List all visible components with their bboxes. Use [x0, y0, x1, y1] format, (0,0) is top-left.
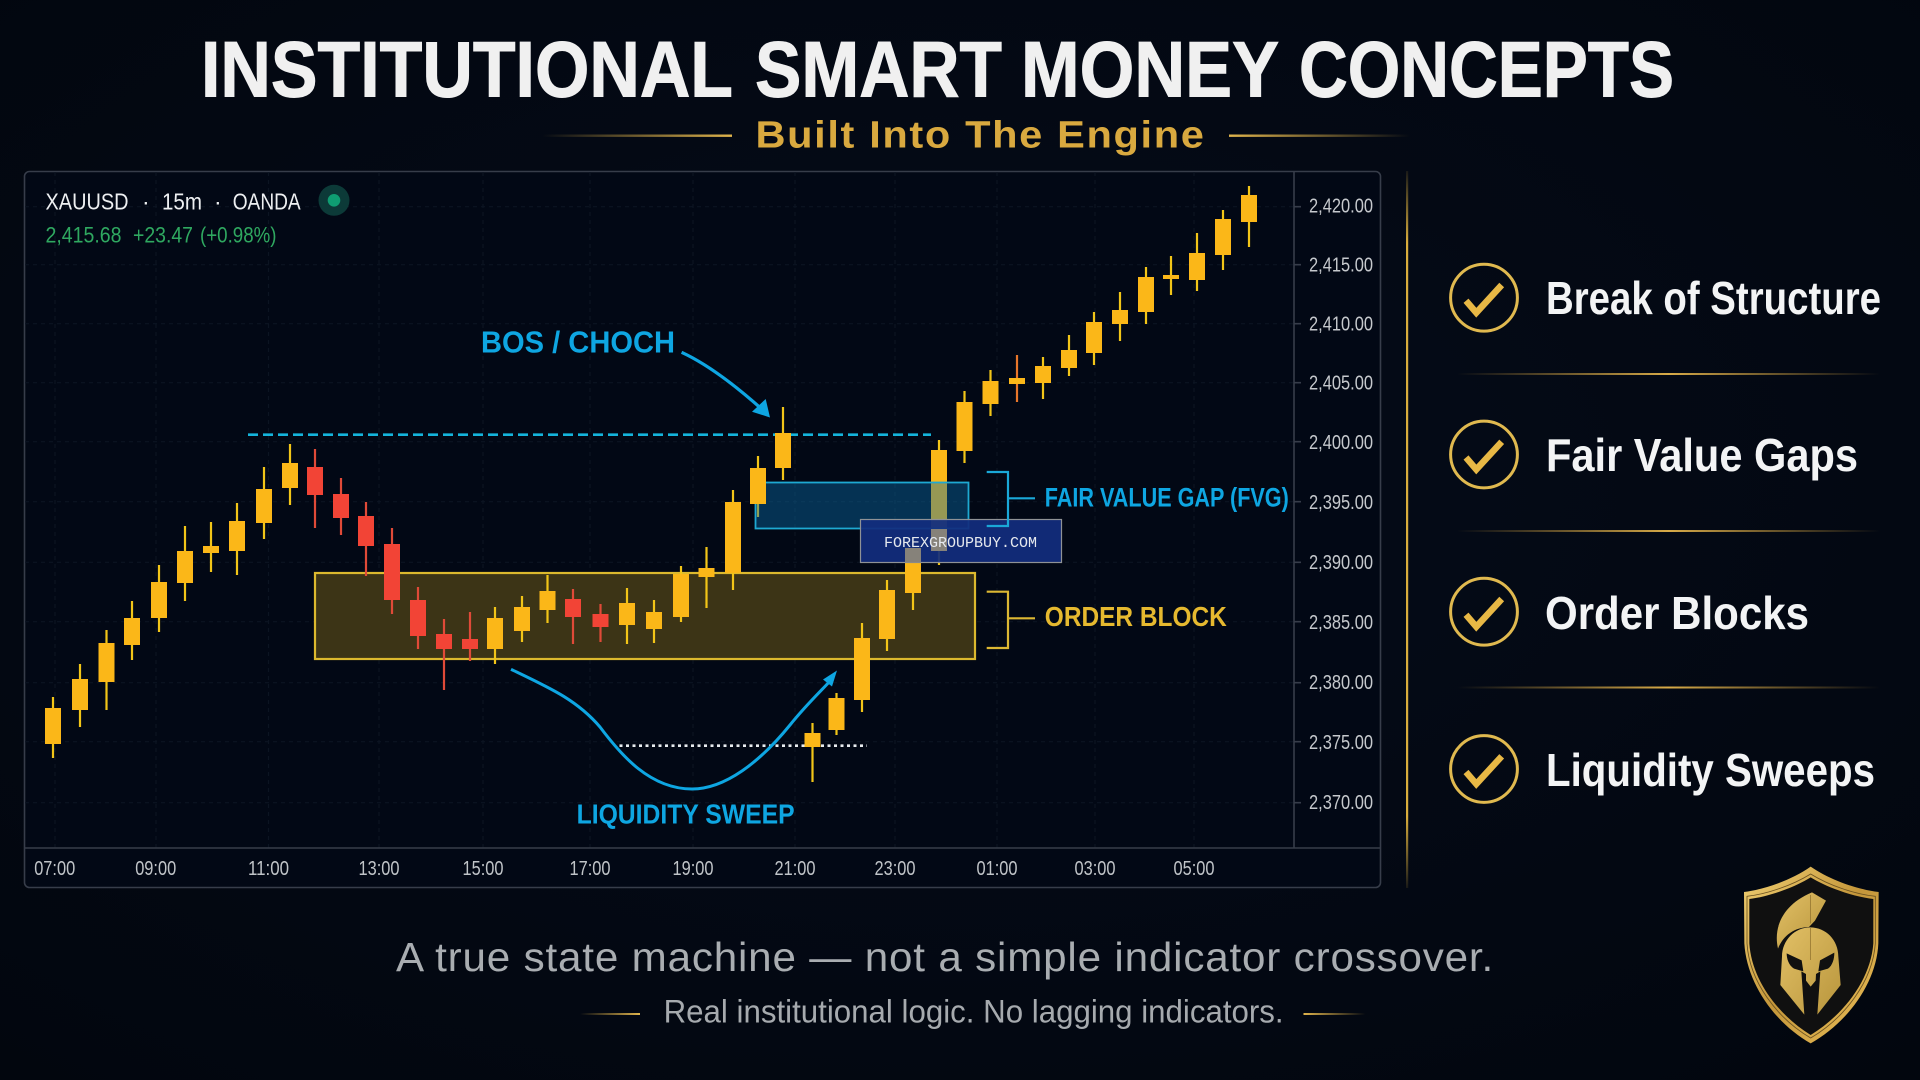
- title: CONCEPTS: [1299, 24, 1674, 114]
- watermark: FOREXGROUPBUY.COM: [884, 535, 1037, 552]
- divider 2: [1457, 530, 1880, 532]
- ticker header: XAUUSD: [46, 188, 128, 214]
- label: liquidity sweep with arrow: LIQUIDITY SWEEP: [577, 798, 795, 830]
- liquidity level dotted line: [620, 744, 867, 747]
- price axis labels: 2,410.00: [1309, 314, 1373, 336]
- time axis labels: 09:00: [135, 858, 176, 880]
- subtitle: Built Into The Engine: [756, 114, 1206, 156]
- ticker header: 15m: [162, 188, 202, 214]
- item: liquidity sweeps: Liquidity Sweeps: [1546, 744, 1875, 796]
- gold vertical divider: [1406, 171, 1408, 888]
- label: fair value gap with bracket: FAIR VALUE GAP (FVG): [1045, 483, 1289, 513]
- footer subline: Real institutional logic. No lagging indicators.: [664, 994, 1284, 1030]
- price axis labels: 2,385.00: [1309, 612, 1373, 634]
- title: SMART: [755, 24, 1002, 114]
- price axis labels: 2,375.00: [1309, 732, 1373, 754]
- label: order block with bracket: ORDER BLOCK: [1045, 601, 1227, 632]
- time axis labels: 03:00: [1074, 858, 1116, 880]
- label: order block with bracket: [987, 592, 1227, 648]
- time axis labels: 17:00: [570, 858, 610, 880]
- price readout: [46, 222, 276, 247]
- time axis labels: [34, 858, 1215, 880]
- price axis labels: 2,400.00: [1309, 432, 1373, 454]
- price axis labels: 2,415.00: [1309, 254, 1373, 276]
- time axis labels: 07:00: [34, 858, 75, 880]
- price axis labels: 2,395.00: [1309, 492, 1373, 514]
- label: liquidity sweep with arrow: [511, 669, 837, 830]
- ticker header: ·: [142, 188, 150, 214]
- label: BOS / CHOCH with arrow: BOS / CHOCH: [481, 324, 675, 360]
- price axis labels: 2,370.00: [1309, 792, 1373, 814]
- watermark: [860, 520, 1062, 562]
- price readout: 2,415.68: [46, 222, 122, 247]
- label: BOS / CHOCH with arrow: [481, 324, 770, 418]
- price axis labels: 2,380.00: [1309, 672, 1373, 694]
- price readout: +23.47: [133, 222, 193, 247]
- time axis labels: 23:00: [874, 858, 916, 880]
- divider 1: [1457, 373, 1880, 375]
- title: [201, 24, 1674, 114]
- panel: feature checklist: [1451, 264, 1881, 802]
- footer tagline: A true state machine — not a simple indicator crossover.: [396, 934, 1494, 980]
- divider 3: [1457, 686, 1880, 688]
- price readout: (+0.98%): [200, 222, 276, 247]
- time axis labels: 01:00: [976, 858, 1018, 880]
- panel: candlestick chart: [24, 172, 1380, 888]
- time axis labels: 21:00: [774, 858, 816, 880]
- title: MONEY: [1021, 24, 1279, 114]
- time axis labels: 11:00: [248, 858, 289, 880]
- fair value gap zone: [756, 482, 968, 528]
- price axis labels: 2,390.00: [1309, 552, 1373, 574]
- icon: spartan shield logo: [1744, 867, 1879, 1043]
- price axis labels: 2,405.00: [1309, 372, 1373, 394]
- item: order blocks: [1451, 578, 1809, 645]
- ticker header: OANDA: [233, 188, 301, 214]
- item: break of structure: [1451, 264, 1881, 331]
- item: fair value gaps: Fair Value Gaps: [1546, 429, 1858, 481]
- item: liquidity sweeps: [1451, 736, 1875, 802]
- ticker header: [46, 188, 301, 214]
- chart axes: [25, 172, 1380, 848]
- ticker header: ·: [214, 188, 222, 214]
- label: fair value gap with bracket: [987, 472, 1289, 526]
- time axis labels: 13:00: [358, 858, 400, 880]
- title: INSTITUTIONAL: [201, 24, 733, 114]
- BOS level dashed line: [248, 433, 931, 436]
- candle body above FVG: [750, 468, 766, 504]
- item: order blocks: Order Blocks: [1545, 587, 1809, 639]
- time axis labels: 19:00: [672, 858, 714, 880]
- time axis labels: 15:00: [462, 858, 504, 880]
- price axis labels: 2,420.00: [1309, 196, 1373, 218]
- chart grid: [25, 172, 1294, 848]
- live status dot: [318, 185, 350, 216]
- price axis labels: [1309, 196, 1373, 814]
- time axis labels: 05:00: [1174, 858, 1214, 880]
- candlesticks: [45, 186, 1257, 782]
- item: fair value gaps: [1451, 421, 1858, 488]
- order block zone: [315, 573, 975, 659]
